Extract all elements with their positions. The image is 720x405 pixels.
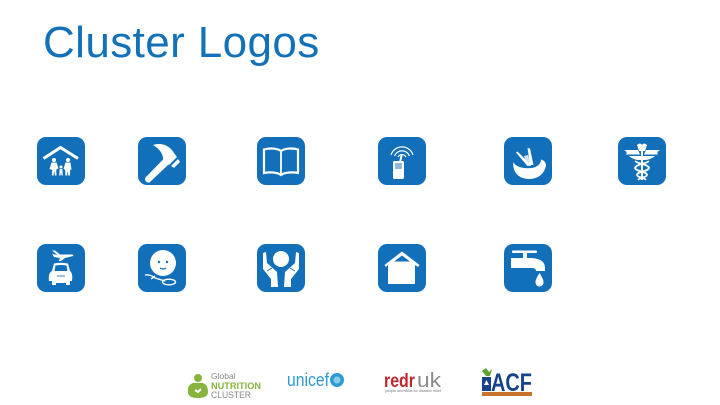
icon: food bowl xyxy=(504,137,552,185)
icon: open book xyxy=(257,137,305,185)
logo: ACF xyxy=(482,368,532,397)
icon: hammer xyxy=(138,137,186,185)
logo: redr uk: people and skills for disaster relief xyxy=(385,389,441,393)
logo: Global Nutrition Cluster: CLUSTER xyxy=(211,390,251,401)
icon: mobile phone with signal xyxy=(378,137,426,185)
logo: unicef: unicef xyxy=(287,370,330,390)
icon: house xyxy=(378,244,426,292)
logo: Global Nutrition Cluster xyxy=(188,371,261,401)
icon: protection hands xyxy=(257,244,305,292)
icon: shelter xyxy=(37,137,85,185)
icon: nutrition baby with spoon xyxy=(138,244,186,292)
title: Cluster Logos xyxy=(43,18,320,67)
logo: Global Nutrition Cluster: Global xyxy=(211,371,236,381)
logo: redr uk xyxy=(384,370,442,393)
logo: redr uk: redr xyxy=(384,371,416,392)
icon: water tap xyxy=(504,244,552,292)
icon: caduceus xyxy=(618,137,666,185)
logo: Global Nutrition Cluster: NUTRITION xyxy=(211,381,261,392)
logo: ACF: ACF xyxy=(491,369,532,397)
icon: transport plane and truck xyxy=(37,244,85,292)
logo: redr uk: uk xyxy=(417,370,442,392)
